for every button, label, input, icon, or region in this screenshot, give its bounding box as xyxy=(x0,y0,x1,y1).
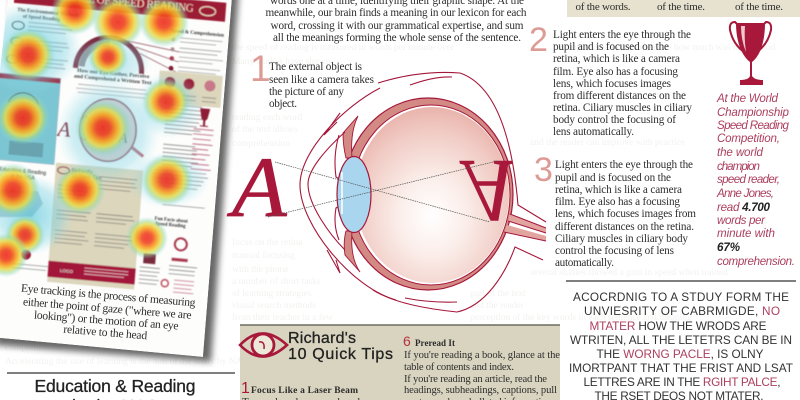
step 1: seen like a camera takes xyxy=(269,74,374,86)
background ghost text: of learning strategies xyxy=(232,288,312,299)
tips heading xyxy=(288,330,393,363)
poster section: environmental methods xyxy=(6,8,79,70)
background ghost text: part of the text xyxy=(470,288,526,299)
step 3: 3 xyxy=(534,151,553,189)
text block: scrambled words xyxy=(566,281,796,400)
panel: top right stats band xyxy=(567,0,800,17)
callout: world champion xyxy=(716,92,795,268)
text block: scrambled words: THE WORNG PACLE, IS OLNY xyxy=(596,347,764,361)
text block: scrambled words: ACOCRDNIG TO A STDUY FORM THE xyxy=(573,290,789,304)
background ghost text xyxy=(5,42,776,367)
poster section: fun facts: Fun Facts about xyxy=(154,217,188,225)
background ghost text: a number of short tasks xyxy=(232,276,321,287)
panel: Richard's 10 quick tips xyxy=(240,325,560,400)
step 1: object. xyxy=(269,98,297,110)
tip 6: headings, subheadings, captions, pull xyxy=(404,385,557,396)
step 2: lens automatically. xyxy=(553,126,634,138)
text block: scrambled words: IMORTPANT THAT THE FRIST AND LSAT xyxy=(569,361,793,375)
text block: scrambled words: UNVIESRITY OF CABRMIGDE, NO xyxy=(584,304,780,318)
background ghost text: reading each word xyxy=(232,113,302,123)
poster caption: eye tracking: either the point of gaze ("where we are xyxy=(23,295,192,322)
poster caption: eye tracking xyxy=(21,282,196,342)
ciliary body xyxy=(343,116,360,272)
poster tips panel: Richard's xyxy=(71,168,93,176)
poster content xyxy=(0,0,228,296)
poster eye diagram xyxy=(56,98,144,163)
letter A object: A xyxy=(227,140,287,235)
step 2: retina. Ciliary muscles in ciliary xyxy=(553,102,692,114)
poster eye diagram: A xyxy=(117,130,129,147)
heading: education and reading: Education & Reading xyxy=(34,376,196,396)
tip 1 xyxy=(241,380,360,400)
background ghost text: Many studies have shown xyxy=(232,57,331,67)
background ghost text: the speed of reading is measured in words per minute over xyxy=(232,42,455,53)
panel: top right stats band: of the time. xyxy=(657,1,705,13)
background ghost text: comprehension tests measure how much was understood xyxy=(560,43,776,53)
poster section: education and reading in the USA: in the USA xyxy=(11,174,35,182)
poster tips panel: 10 Quick Tips xyxy=(71,173,102,182)
poster section: fun facts xyxy=(138,169,208,294)
text block: scrambled words: MTATER HOW THE WRODS ARE xyxy=(590,319,767,333)
poster caption: eye tracking: relative to the head xyxy=(63,323,148,342)
tip 6: If you're reading a book, glance at the xyxy=(404,350,560,361)
top intro text block xyxy=(266,0,527,44)
background ghost text: of the text allows xyxy=(232,124,298,135)
step 3: Light enters the eye through the xyxy=(555,159,693,171)
tip 6 xyxy=(403,333,560,400)
step 3: Ciliary muscles in ciliary body xyxy=(555,233,688,245)
poster heading: how our eye: How our Eye Gather, Perceive xyxy=(77,68,150,80)
tip 6: Preread It xyxy=(415,338,455,348)
poster shadow xyxy=(0,0,239,362)
step 3: film. Eye also has a focusing xyxy=(555,196,680,208)
heading: education and reading xyxy=(7,373,235,400)
tip 6: If you're reading an article, read the xyxy=(404,374,547,385)
callout: world champion: comprehension. xyxy=(717,255,795,268)
step 1: 1 xyxy=(250,48,271,89)
icon: eye xyxy=(240,334,287,356)
callout: world champion: words per xyxy=(717,214,766,227)
background ghost text: manual focusing xyxy=(232,250,295,261)
step 2: film. Eye also has a focusing xyxy=(553,66,678,78)
tip 1: 1 xyxy=(241,380,250,397)
poster section: education and reading in the USA: Education & Reading xyxy=(0,167,46,177)
background ghost text: and the reader can improve with practice xyxy=(530,138,685,148)
step 2: lens, which focuses images xyxy=(553,78,671,90)
tips heading: 10 Quick Tips xyxy=(288,346,393,363)
poster tips panel xyxy=(47,163,143,290)
step 1 xyxy=(250,48,374,110)
tips heading: Richard's xyxy=(288,330,356,347)
tip 6: table of contents and index. xyxy=(404,362,514,373)
poster section: environmental methods: of Speed Reading xyxy=(23,15,61,23)
callout: world champion: champion xyxy=(717,160,760,173)
callout: world champion: Competition, xyxy=(717,132,780,145)
background ghost text: comprehension xyxy=(232,139,290,149)
background ghost text: perception of the key words in each sentence and meaning xyxy=(470,312,692,323)
background ghost text: focus on the retina xyxy=(232,237,303,248)
poster left blue panel xyxy=(0,73,61,165)
step 2 xyxy=(529,21,692,138)
step 2: retina, which is like a camera xyxy=(553,53,680,65)
step 3: pupil and is focused on the xyxy=(555,172,671,184)
callout: world champion: speed reader, xyxy=(717,173,780,186)
callout: world champion: the world xyxy=(717,146,764,159)
poster gauge chart xyxy=(75,35,180,77)
step 3: retina, which is like a camera xyxy=(555,184,682,196)
top intro text block: all the meanings forming the whole sense of the sentence. xyxy=(273,32,521,44)
poster section: speed and comprehension: Speed & Comprehension xyxy=(171,29,224,39)
optic nerve xyxy=(504,214,546,241)
poster tips panel: LOGO xyxy=(60,268,74,274)
background ghost text: from their teacher in a few xyxy=(232,312,333,323)
step 2: body control the focusing of xyxy=(553,114,676,126)
poster right column text xyxy=(162,104,204,168)
panel: tilted poster with heat map xyxy=(0,0,232,357)
background ghost text: several studies showed a gain in speed when trained xyxy=(530,268,728,278)
lens xyxy=(337,156,371,232)
poster section: environmental methods: The Environmental Methods xyxy=(17,8,79,19)
background ghost text: with the phone xyxy=(232,265,288,275)
callout: world champion: Speed Reading xyxy=(717,119,790,132)
poster section: speed and comprehension xyxy=(168,29,225,75)
text block: scrambled words: LETTRES ARE IN THE RGIHT PALCE, xyxy=(584,375,780,389)
poster heading: how our eye xyxy=(73,68,152,99)
top intro text block: word, crossing it with our grammatical expertise, and sum xyxy=(270,20,524,32)
background ghost text: and the reader xyxy=(470,301,525,311)
inverted letter A on retina: A xyxy=(459,141,514,241)
poster title band xyxy=(14,0,226,22)
step 2: Light enters the eye through the xyxy=(553,29,691,41)
step 2: pupil and is focused on the xyxy=(553,41,669,53)
poster heading: how our eye: and Comprehend a Written Text xyxy=(74,74,152,87)
light ray lines xyxy=(268,161,497,222)
icon: trophy xyxy=(730,22,771,85)
panel: top right stats band: of the time. xyxy=(735,1,783,13)
poster caption: eye tracking: Eye tracking is the process of measuring xyxy=(21,282,196,309)
poster trophy xyxy=(199,108,210,127)
tip 1: Focus Like a Laser Beam xyxy=(251,386,358,396)
callout: world champion: read 4.700 xyxy=(717,201,771,214)
background ghost text: Accelerating the rate of learning is the aim of the study by NASA xyxy=(5,356,255,367)
poster section: education and reading in the USA xyxy=(0,166,48,272)
step 2: from different distances on the xyxy=(553,90,686,102)
heat map overlay xyxy=(0,0,210,277)
callout: world champion: At the World xyxy=(716,92,779,105)
top intro text block: meanwhile, our brain finds a meaning in our lexicon for each xyxy=(266,7,527,19)
poster tan stats panel xyxy=(157,70,223,108)
step 3: different distances on the retina. xyxy=(555,221,694,233)
callout: world champion: minute with xyxy=(717,227,775,240)
poster caption: eye tracking: looking") or the motion of an eye xyxy=(33,308,179,333)
background ghost text: visual search methods xyxy=(232,301,316,311)
step 3: automatically. xyxy=(555,257,614,269)
tip 6: 6 xyxy=(403,333,411,349)
poster pink italic text xyxy=(191,129,214,171)
step 3: control the focusing of lens xyxy=(555,245,674,257)
eyeball xyxy=(343,98,513,290)
step 1: the picture of any xyxy=(269,86,344,98)
eye diagram xyxy=(227,72,546,312)
panel: top right stats band: of the words. xyxy=(576,1,631,13)
step 1: The external object is xyxy=(269,61,362,73)
callout: world champion: Championship xyxy=(717,106,790,119)
step 3 xyxy=(534,151,696,269)
poster eye diagram: A xyxy=(55,116,72,142)
step 3: lens, which focuses images from xyxy=(555,208,696,220)
step 2: 2 xyxy=(529,21,548,59)
poster section: fun facts: Speed Reading xyxy=(155,222,186,230)
background ghost text: comprehension xyxy=(5,343,63,353)
text block: scrambled words: WTRITEN, ALL THE LETETRS CAN BE IN xyxy=(570,333,792,347)
callout: world champion: Anne Jones, xyxy=(716,187,774,200)
callout: world champion: 67% xyxy=(717,241,740,254)
eyelids and cornea xyxy=(300,72,546,312)
